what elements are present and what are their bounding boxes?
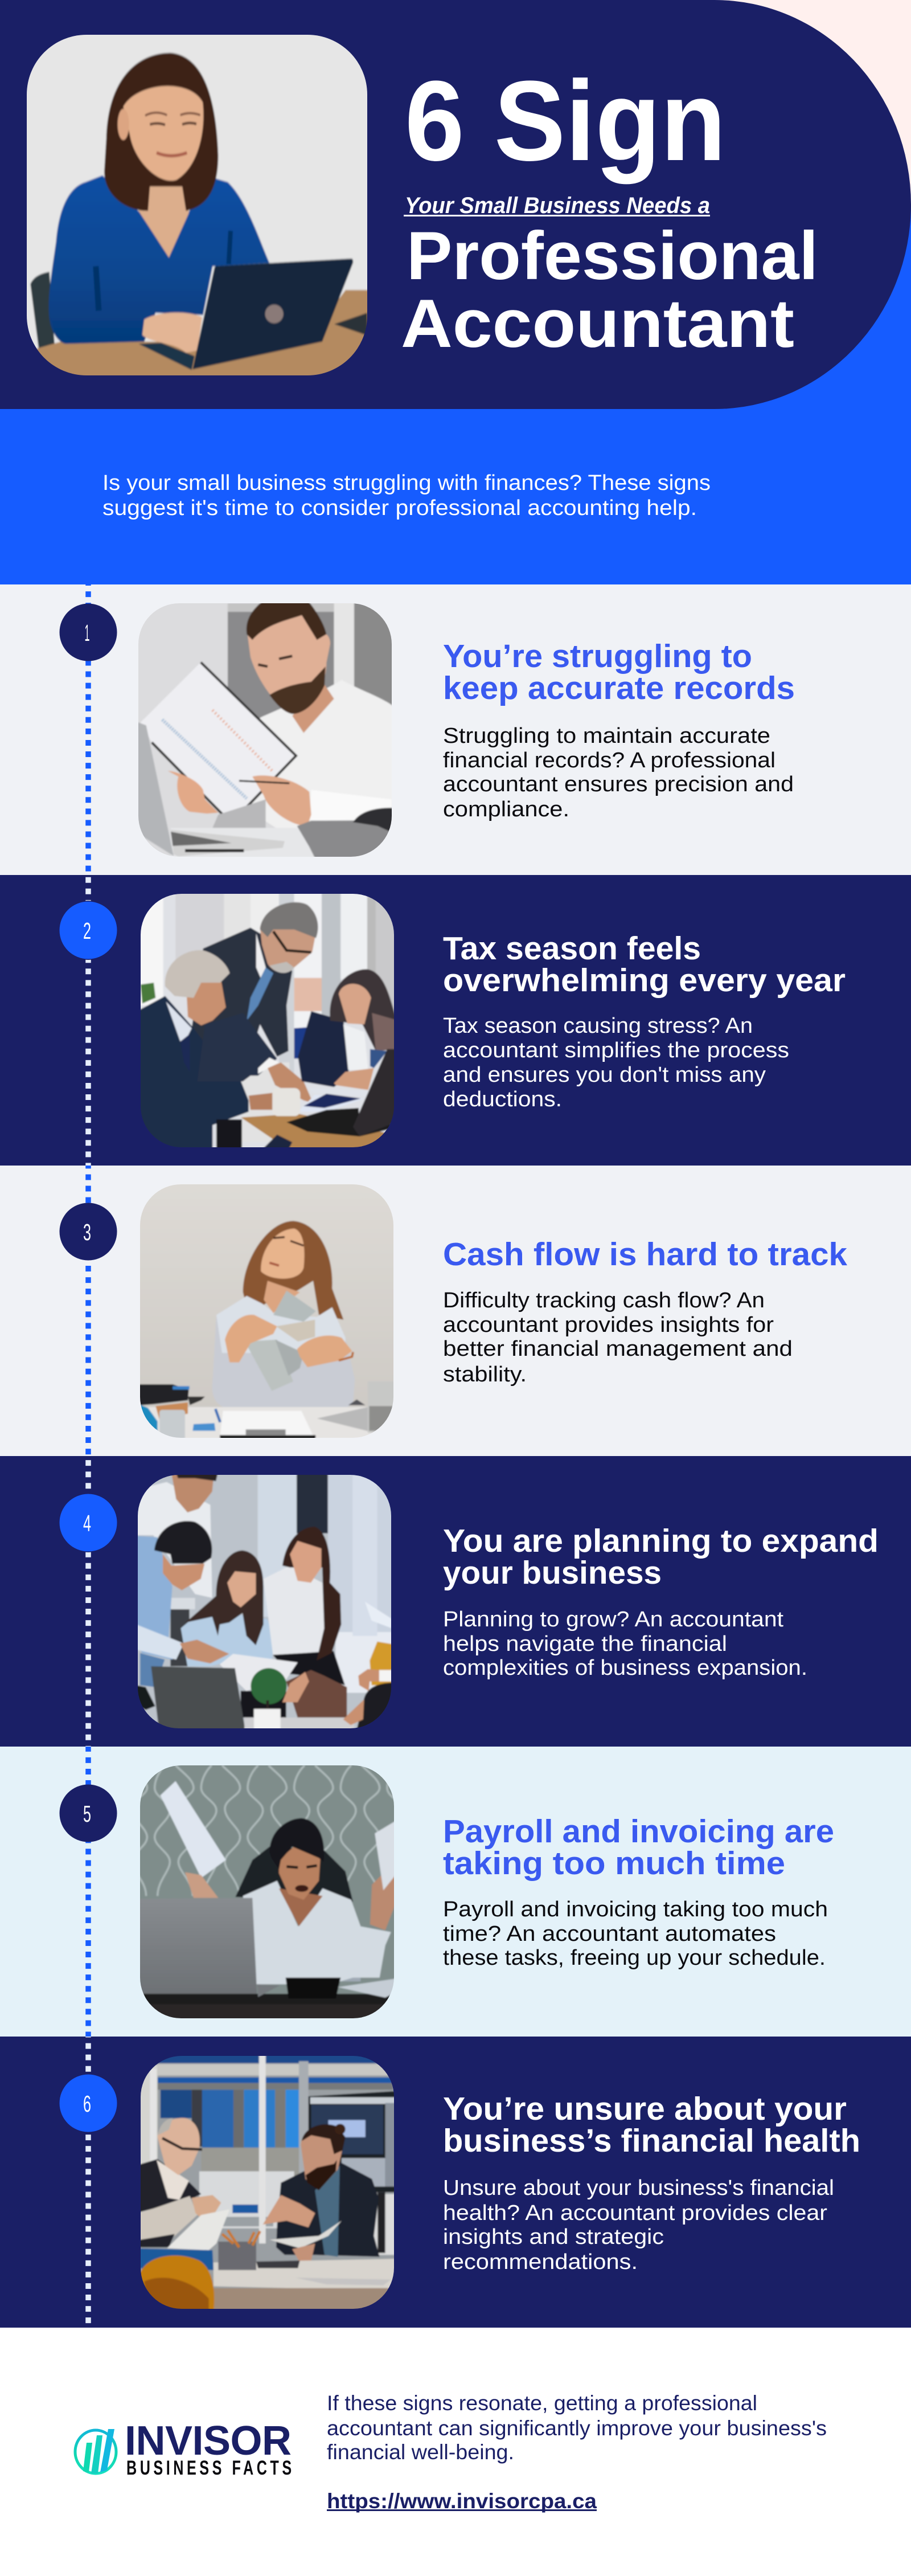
icon: logo chart mark [75, 2429, 116, 2473]
heading 5: taking too much time [443, 1845, 785, 1882]
body 5: time? An accountant automates [443, 1922, 776, 1946]
number badge 2 [59, 901, 118, 960]
closing text: accountant can significantly improve your business's [327, 2416, 827, 2440]
body 3: accountant provides insights for [443, 1313, 774, 1337]
photo: team reviewing documents [138, 1475, 391, 1728]
body 4: Planning to grow? An accountant [443, 1608, 783, 1632]
timeline dotted line [85, 580, 91, 2324]
number badge 3 [59, 1203, 117, 1260]
photo: woman holding money [140, 1184, 393, 1438]
logo tagline: BUSINESS FACTS [126, 2457, 292, 2479]
photo: man reviewing chart [138, 603, 392, 857]
number badge 5 [59, 1784, 117, 1842]
number badge 6 [59, 2074, 118, 2133]
closing text: financial well-being. [327, 2440, 514, 2464]
heading 2: overwhelming every year [443, 962, 846, 999]
photo: stressed woman with papers [140, 1765, 394, 2018]
panel: sign 3 [0, 1166, 911, 1456]
title line: 6 Sign: 6 Sign [405, 58, 726, 185]
body 2 [443, 1014, 789, 1111]
logo wordmark: INVISOR [125, 2418, 292, 2464]
body 6 [443, 2176, 834, 2274]
title [401, 58, 818, 362]
heading 2 [443, 930, 846, 999]
body 3: Difficulty tracking cash flow? An [443, 1289, 765, 1312]
number badge 4: 4 [83, 1510, 91, 1536]
body 1 [443, 724, 794, 821]
body 3: stability. [443, 1363, 527, 1387]
body 2: Tax season causing stress? An [443, 1014, 753, 1038]
panel: sign 5 [0, 1747, 911, 2037]
heading 5 [443, 1813, 834, 1882]
heading 6 [443, 2091, 860, 2159]
title line: Accountant: Accountant [401, 285, 794, 362]
heading 2: Tax season feels [443, 930, 701, 967]
body 1: Struggling to maintain accurate [443, 724, 770, 748]
logo [75, 2418, 292, 2479]
body 1: financial records? A professional [443, 749, 775, 772]
body 4 [443, 1608, 807, 1680]
body 6: insights and strategic [443, 2225, 664, 2249]
number badge 3: 3 [83, 1219, 91, 1245]
header background [0, 0, 911, 584]
heading 4: your business [443, 1555, 662, 1591]
panel: sign 4 [0, 1456, 911, 1747]
heading 6: business’s financial health [443, 2123, 860, 2159]
body 6: Unsure about your business's financial [443, 2176, 834, 2200]
photo: woman at laptop [27, 35, 367, 375]
number badge 6: 6 [83, 2091, 91, 2117]
body 2: deductions. [443, 1087, 562, 1111]
title line: Professional: Professional [407, 218, 818, 294]
body 5: these tasks, freeing up your schedule. [443, 1946, 826, 1970]
number badge 2: 2 [83, 918, 91, 944]
body 4: helps navigate the financial [443, 1632, 727, 1656]
heading 1: keep accurate records [443, 670, 795, 706]
number badge 1 [59, 604, 117, 661]
intro text [102, 471, 711, 520]
body 3: better financial management and [443, 1337, 793, 1361]
body 1: compliance. [443, 798, 569, 821]
body 1: accountant ensures precision and [443, 772, 794, 796]
body 2: and ensures you don't miss any [443, 1063, 766, 1087]
body 6: health? An accountant provides clear [443, 2201, 827, 2225]
number badge 5: 5 [83, 1801, 91, 1827]
body 6: recommendations. [443, 2250, 638, 2274]
heading 1 [443, 638, 795, 706]
closing text [327, 2391, 827, 2464]
number badge 1: 1 [84, 620, 90, 646]
body 5 [443, 1898, 828, 1970]
panel: footer [0, 2328, 911, 2576]
subtitle: Your Small Business Needs a [405, 193, 710, 218]
intro text: Is your small business struggling with finances? These signs [102, 471, 711, 495]
heading 3: Cash flow is hard to track [443, 1236, 847, 1273]
number badge 4 [59, 1493, 118, 1552]
heading 4 [443, 1523, 879, 1591]
panel: sign 2 [0, 875, 911, 1166]
panel: sign 1 [0, 584, 911, 875]
body 5: Payroll and invoicing taking too much [443, 1898, 828, 1921]
photo: three colleagues at table [141, 894, 394, 1147]
website link: https://www.invisorcpa.ca [327, 2489, 597, 2513]
photo: two men in factory office [141, 2056, 394, 2309]
closing text: If these signs resonate, getting a professional [327, 2391, 757, 2415]
heading 5: Payroll and invoicing are [443, 1813, 834, 1850]
body 2: accountant simplifies the process [443, 1038, 789, 1062]
body 3 [443, 1289, 793, 1387]
body 4: complexities of business expansion. [443, 1656, 807, 1680]
heading 6: You’re unsure about your [443, 2091, 847, 2127]
heading 1: You’re struggling to [443, 638, 752, 674]
panel: sign 6 [0, 2037, 911, 2328]
intro text: suggest it's time to consider professional accounting help. [102, 496, 697, 520]
heading 4: You are planning to expand [443, 1523, 879, 1559]
header panel [0, 0, 911, 409]
